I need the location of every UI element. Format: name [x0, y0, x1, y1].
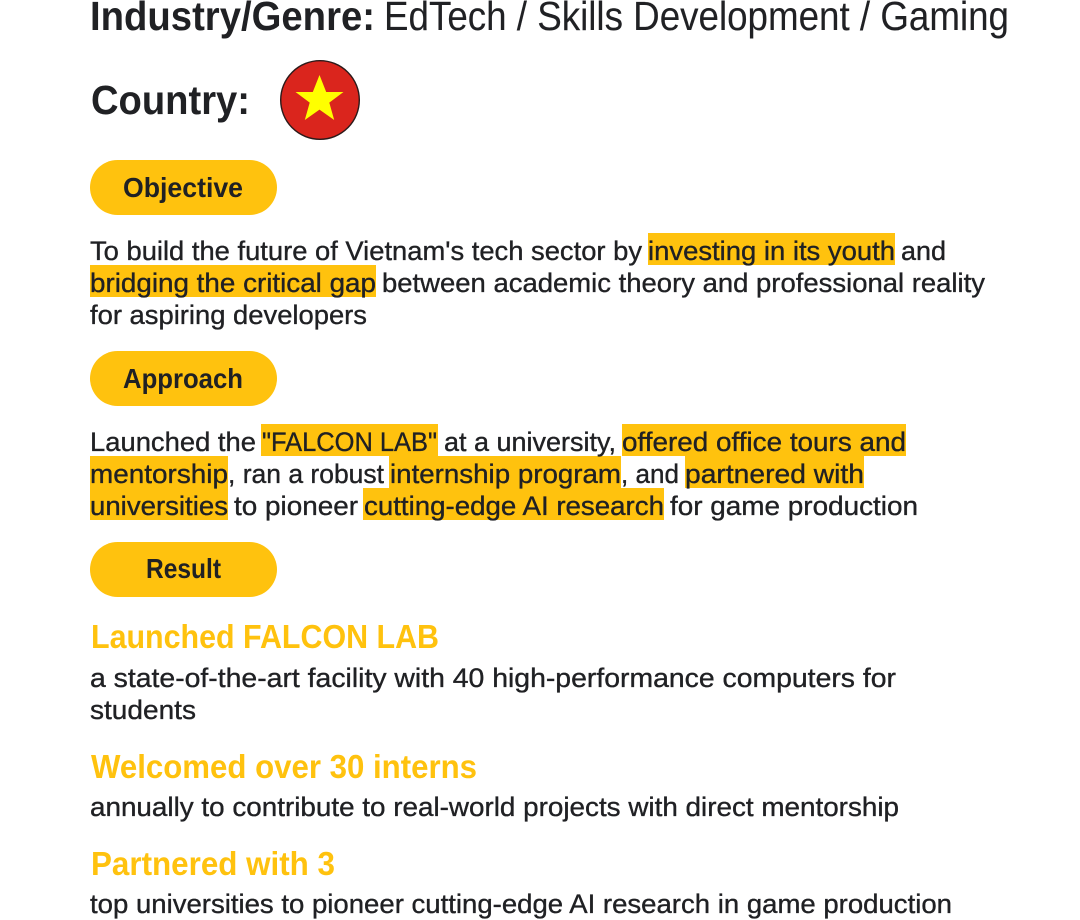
- result: welcomed interns: annually to contribute to real-world projects with direct mentorship: [90, 792, 899, 822]
- text block: objective description: bridging the critical gap: [90, 268, 376, 298]
- result: launched FALCON LAB: a state-of-the-art facility with 40 high-performance computers for: [90, 663, 896, 693]
- text block: objective description: for aspiring developers: [90, 300, 367, 330]
- text block: approach description: partnered with: [685, 459, 864, 489]
- result: welcomed interns: Welcomed over 30 interns: [91, 748, 477, 785]
- result: university partnerships: Partnered with 3: [91, 845, 335, 882]
- text block: approach description: "FALCON LAB": [262, 427, 437, 457]
- result: launched FALCON LAB: students: [90, 695, 196, 725]
- heading: industry and genre: [90, 0, 1009, 39]
- result: launched FALCON LAB: [90, 618, 896, 725]
- icon: Vietnam flag: [281, 61, 359, 139]
- text block: approach description: cutting-edge AI research: [364, 491, 664, 521]
- heading: country: Country:: [91, 77, 250, 123]
- text block: approach description: offered office tours and: [622, 427, 906, 457]
- pill: result: [90, 542, 277, 597]
- text block: approach description: to pioneer: [234, 491, 358, 521]
- text block: approach description: internship program: [390, 459, 621, 489]
- pill: approach: [90, 351, 277, 406]
- text block: approach description: Launched the: [90, 427, 256, 457]
- pill: approach: Approach: [123, 363, 243, 394]
- result: welcomed interns: [90, 748, 899, 822]
- text block: approach description: [90, 424, 918, 521]
- text block: approach description: , and: [621, 459, 679, 489]
- result: university partnerships: top universities to pioneer cutting-edge AI research in game production: [90, 889, 952, 919]
- result: university partnerships: [90, 845, 952, 919]
- text block: objective description: between academic theory and professional reality: [382, 268, 986, 298]
- text block: approach description: mentorship: [90, 459, 228, 489]
- pill: objective: [90, 160, 277, 215]
- text block: objective description: [90, 233, 986, 330]
- text block: approach description: , ran a robust: [228, 459, 384, 489]
- text block: approach description: universities: [90, 491, 228, 521]
- text block: objective description: and: [901, 236, 946, 266]
- text block: objective description: To build the future of Vietnam's tech sector by: [90, 236, 642, 266]
- pill: result: Result: [146, 553, 221, 584]
- text block: approach description: at a university,: [444, 427, 616, 457]
- result: launched FALCON LAB: Launched FALCON LAB: [91, 618, 439, 655]
- text block: approach description: for game production: [670, 491, 918, 521]
- pill: objective: Objective: [123, 172, 243, 203]
- text block: objective description: investing in its youth: [648, 236, 895, 266]
